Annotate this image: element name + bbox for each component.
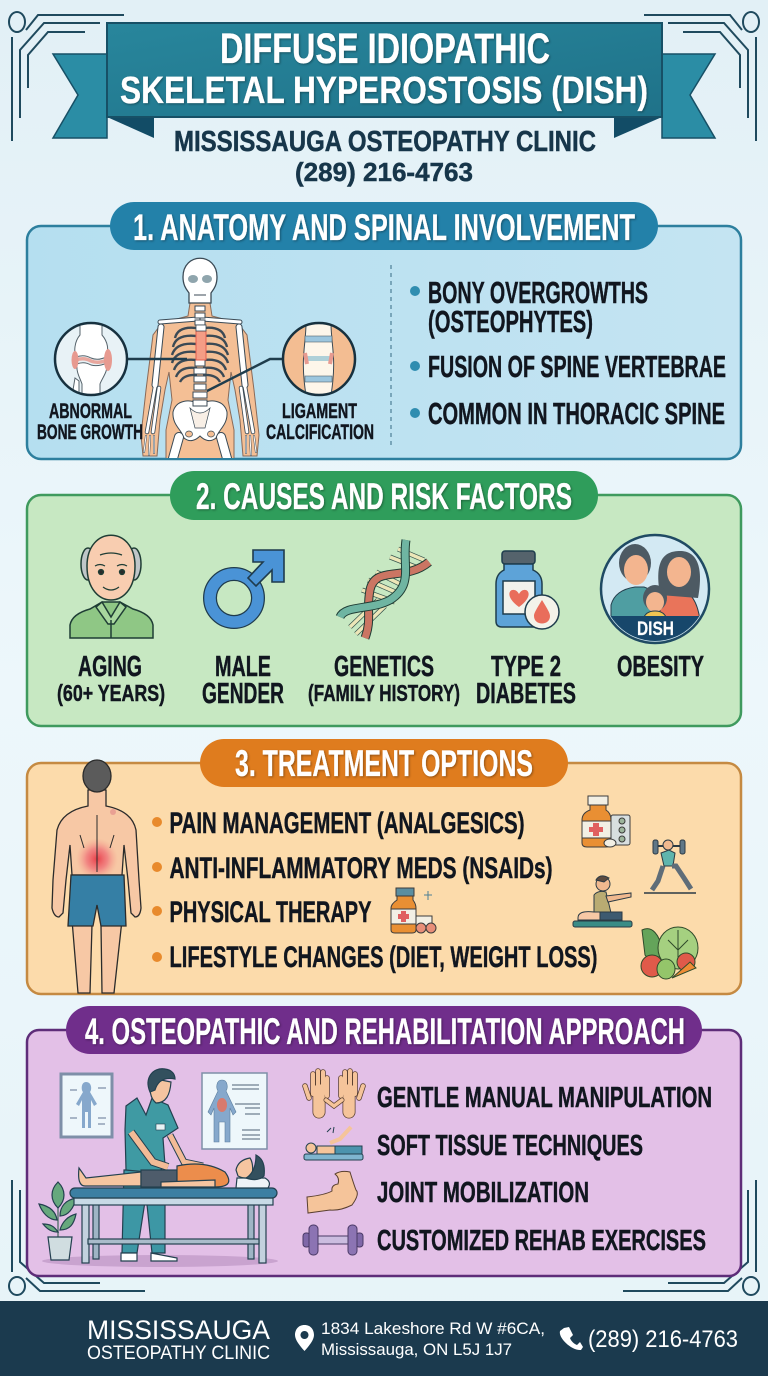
anatomy bullet list: BONY OVERGROWTHS	[428, 275, 648, 310]
risk factor labels: GENETICS	[334, 651, 434, 683]
label	[37, 400, 143, 444]
treatment bullet list: PHYSICAL THERAPY	[170, 896, 372, 929]
footer logo text: OSTEOPATHY CLINIC	[87, 1343, 270, 1364]
footer bar	[0, 1301, 768, 1376]
title banner	[53, 23, 715, 138]
icon: vegetables	[641, 927, 698, 979]
clinic name and phone: (289) 216-4763	[295, 157, 473, 187]
risk factor labels: GENDER	[202, 678, 284, 710]
icon: seated stretch	[573, 876, 632, 927]
icon: bottle inline	[391, 888, 436, 933]
clinic name and phone: MISSISSAUGA OSTEOPATHY CLINIC	[174, 126, 596, 158]
icon: flexed arm	[307, 1171, 357, 1213]
risk factor labels: DIABETES	[476, 678, 576, 710]
massage table	[70, 1188, 277, 1263]
risk factor labels: MALE	[215, 651, 271, 683]
panel: anatomy	[27, 202, 741, 462]
approach list: JOINT MOBILIZATION	[377, 1177, 589, 1209]
wall chart right	[202, 1073, 267, 1149]
icon: family DISH badge	[600, 535, 710, 646]
icon: open hands	[305, 1071, 363, 1112]
risk factor labels: TYPE 2	[491, 651, 561, 683]
risk factor labels: (60+ YEARS)	[57, 680, 165, 706]
panel: treatment options	[27, 739, 741, 994]
panel: causes and risk factors	[27, 471, 741, 726]
anatomy bullet list	[410, 275, 726, 431]
label	[266, 400, 374, 444]
anatomy bullet list: (OSTEOPHYTES)	[428, 304, 593, 339]
illustration: therapist with patient	[39, 1069, 278, 1267]
heading pill 2: 2. CAUSES AND RISK FACTORS	[196, 476, 572, 517]
plant	[39, 1182, 76, 1260]
title text	[120, 25, 648, 112]
treatment bullet list	[152, 807, 598, 974]
treatment bullet list: PAIN MANAGEMENT (ANALGESICS)	[170, 807, 524, 840]
icon: medicine bottle with blood drop	[496, 551, 559, 629]
address: 1834 Lakeshore Rd W #6CA,	[321, 1319, 545, 1338]
patient	[79, 1155, 269, 1188]
title text: SKELETAL HYPEROSTOSIS (DISH)	[120, 70, 648, 112]
skeleton figure	[141, 258, 259, 462]
icon: dumbbell	[303, 1225, 363, 1255]
label: BONE GROWTH	[37, 421, 143, 444]
icon: medication	[582, 796, 630, 847]
risk factor labels: (FAMILY HISTORY)	[308, 680, 460, 706]
treatment bullet list: ANTI-INFLAMMATORY MEDS (NSAIDs)	[170, 852, 552, 885]
clinic name and phone	[174, 126, 596, 187]
label: LIGAMENT	[282, 400, 357, 423]
risk factor labels: OBESITY	[617, 651, 704, 683]
icon: phone	[560, 1327, 583, 1350]
wall chart left	[61, 1074, 112, 1137]
therapist	[121, 1069, 203, 1261]
title text: DIFFUSE IDIOPATHIC	[220, 25, 550, 73]
icon: older man	[70, 535, 153, 638]
icon: soft tissue massage	[304, 1127, 363, 1160]
address: Mississauga, ON L5J 1J7	[321, 1340, 512, 1359]
floor shadow	[42, 1255, 278, 1267]
address	[321, 1319, 545, 1359]
risk factor labels	[57, 651, 704, 710]
heading pill 3: 3. TREATMENT OPTIONS	[235, 743, 533, 784]
icon: DNA helix	[340, 540, 429, 638]
heading pill 3	[200, 739, 568, 787]
icon: male symbol	[210, 550, 284, 622]
label: ABNORMAL	[49, 400, 132, 423]
heading pill 1	[110, 202, 658, 250]
footer logo text: MISSISSAUGA	[87, 1315, 270, 1345]
callout: abnormal bone growth	[37, 320, 187, 444]
icon: map pin	[295, 1325, 314, 1351]
icon: weight lifter	[644, 840, 696, 893]
label: CALCIFICATION	[266, 421, 374, 444]
footer logo text	[87, 1315, 270, 1364]
approach list	[377, 1082, 712, 1257]
callout: ligament calcification	[207, 323, 374, 444]
icon: family DISH badge: DISH	[637, 619, 674, 640]
heading pill 2	[170, 471, 598, 520]
footer phone number: (289) 216-4763	[588, 1326, 738, 1353]
approach list: SOFT TISSUE TECHNIQUES	[377, 1130, 643, 1162]
figure: man from behind with back pain	[52, 760, 141, 993]
risk factor labels: AGING	[78, 651, 142, 683]
panel: osteopathic approach	[27, 1006, 741, 1276]
